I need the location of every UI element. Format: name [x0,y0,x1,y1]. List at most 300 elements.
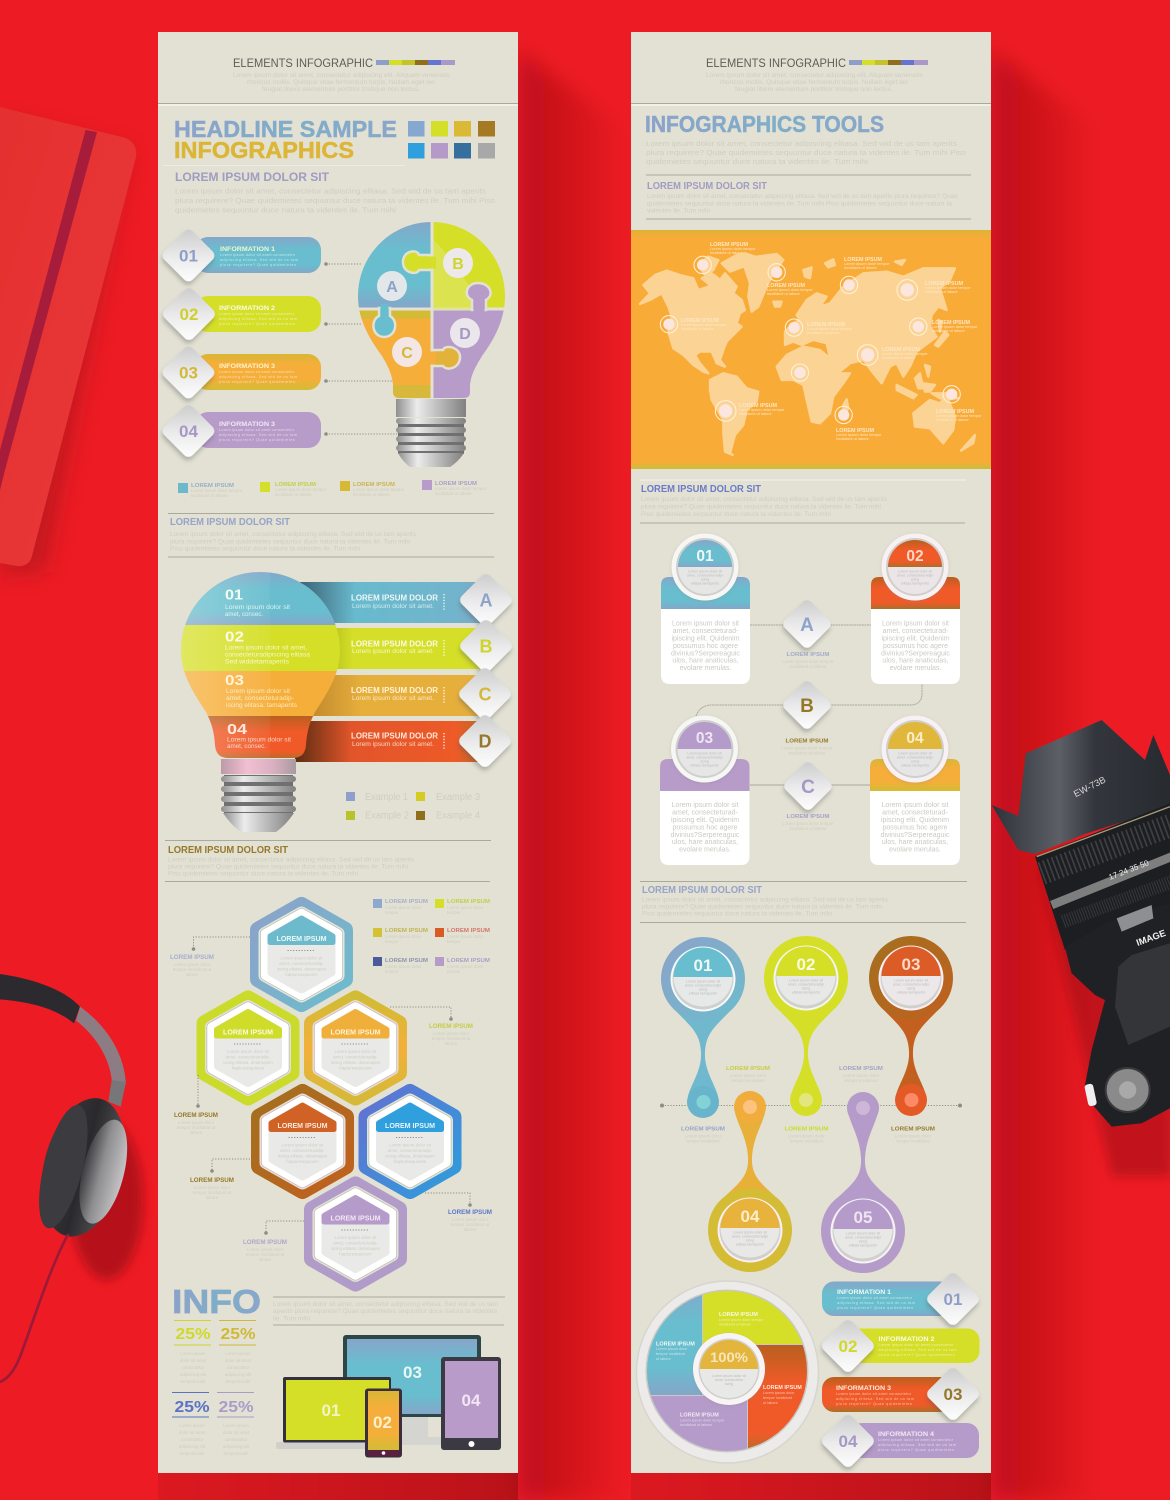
hexagon callout 4 [190,1159,250,1200]
hexagon 4: Lorem ipsum dolor sit [282,1142,324,1148]
pie labels: tempor incididunt [763,1396,793,1400]
diamond B: Lorem ipsum dolor tempor [781,746,833,750]
map labels [681,242,982,441]
pie labels: ut labore [763,1401,778,1405]
section intro map [646,175,971,219]
ribbon C: Lorem ipsum dolor sit amet. [352,695,434,702]
info text block: aperits plura requirere? Quae quidemietes sequuntur duce natura ta videntes [273,1308,498,1315]
card 04: possumus hoc agere [883,824,948,832]
info text block: ile. Tum mihi [273,1316,311,1322]
hexagon 6: LOREM IPSUM [330,1214,380,1222]
bulb 2 screw base [221,759,296,832]
band 01 text [225,586,290,618]
band 04 text [227,721,291,750]
stat 25% purple: Lorem ipsum [223,1423,249,1428]
map labels: Lorem ipsum dolor tempor [710,246,756,251]
hexagon 1 [258,906,344,1004]
stat 25% gold: 25% [220,1326,256,1343]
hexagon callout 1: LOREM IPSUM [170,955,214,961]
hexagon callout 6 [243,1221,304,1262]
stat 25% blue: Lorem ipsum [179,1423,205,1428]
stat 25% purple: 25% [218,1399,254,1416]
panel shadows [158,50,1100,1500]
stat 25% lime: dolor sit amet [180,1358,207,1363]
info pill 4: Lorem ipsum dolor sit amet consectetur [219,428,295,432]
hexagon 1: iscing elitasa. detamapen [277,966,327,972]
card 01: ipiscing elit. Quidenim [671,636,740,642]
info pill 1 [160,227,321,284]
right pill 4 [820,1413,979,1469]
hexagon callout 5 [425,1193,492,1232]
hexagon 3: amet, consecteturadip- [333,1054,378,1060]
card connectors [696,625,922,785]
puzzle piece B [434,220,508,308]
pin 04: amet, consecteturadipi [732,1234,768,1238]
panel: right sheet [631,32,991,1473]
hexagon callout 3: LOREM IPSUM [429,1024,473,1030]
legend row [178,480,487,498]
ribbon B: Lorem ipsum dolor sit amet. [352,648,434,655]
headband arm [76,1007,126,1084]
stat 25% gold: Lorem ipsum [225,1351,251,1356]
hexagon 6: amet, consecteturadip- [333,1240,378,1246]
timeline line [660,1104,962,1108]
hexagon callout 5: LOREM IPSUM [448,1210,492,1216]
map labels: LOREM IPSUM [844,257,883,263]
hexagon legend: tempor [385,969,399,974]
hexagon 4: amet, consecteturadip- [280,1148,325,1153]
pie labels: tempor incididunt [656,1352,686,1356]
pin 01: tempor incididunt [686,1138,720,1144]
pin 02: Lorem ipsum dolor [788,1134,825,1138]
pin 05: scing [859,1240,867,1244]
legend row: LOREM IPSUM [275,482,316,488]
hexagon callout 5: labore [464,1227,477,1232]
hexagon callout 6: labore [259,1257,272,1262]
section intro cards: Piso quidemietes sequuntur duce natura ta videntes ile. Tum mihi [641,511,832,518]
laptop: 01 [322,1401,340,1420]
stat 25% gold: dolor sit amet [225,1358,252,1363]
card 02: elitasa tamaperits [901,582,929,586]
map labels: Lorem ipsum dolor tempor [681,322,727,327]
band 02 text [225,628,311,666]
pin 04: elitasa tamaperits [736,1242,764,1246]
section intro 1: Lorem ipsum dolor sit amet, consectetur adipiscing elitasa. Sed wid de us tam aperits [175,186,486,196]
map labels: incididunt ut labore [681,326,714,331]
pin 01: Lorem ipsum dolor [685,1134,722,1138]
right pill 2: Lorem ipsum dolor sit amet consectetur [878,1343,954,1347]
card 01: amet, consecteturadipi [687,574,723,578]
hexagon legend: LOREM IPSUM [447,958,490,964]
hexagon 2: LOREM IPSUM [223,1028,273,1036]
hexagon callout 2: LOREM IPSUM [174,1113,218,1119]
card 02: amet, consecteturad- [883,628,949,635]
pie labels: ut labore [656,1357,671,1361]
band 03 text: Lorem ipsum dolor sit [226,688,290,695]
section intro 2: Piso quidemietes sequuntur duce natura ta videntes ile. Tum mihi [170,546,361,552]
stat 25% purple: consectetur [225,1437,248,1442]
diamond C: Lorem ipsum dolor tempor [782,821,834,826]
header colour bar [376,60,455,65]
pin 04: Lorem ipsum dolor sit [733,1230,767,1234]
stat 25% blue: dolor sit amet [179,1430,206,1435]
hexagon 1: LOREM IPSUM [276,934,326,943]
map labels: incididunt ut labore [710,250,743,255]
hexagon 6: Lorem ipsum dolor sit [335,1235,377,1240]
hexagon legend: tempor [447,939,461,944]
map labels: LOREM IPSUM [925,281,964,287]
pin 05: Lorem ipsum dolor [843,1073,880,1078]
section intro 1 [163,166,495,214]
band 04 text: 04 [227,721,248,738]
card 04: amet, consecteturadipi [897,756,933,760]
pin 02: scing [802,986,810,990]
map labels: LOREM IPSUM [936,409,975,415]
map labels: Lorem ipsum dolor tempor [844,261,890,266]
legend row: incididunt ut labore [275,492,312,497]
pie labels: incididunt ut labore [719,1322,751,1326]
bulb label D [450,318,480,348]
section intro 1: quidemietes sequuntur duce natura ta videntes ile. Tum mihi [175,206,396,214]
band 04 text: amet, consec. [227,743,266,750]
card 03: Lorem ipsum dolor sit [672,802,739,809]
hexagon legend: Lorem ipsum dolor [447,934,484,939]
diamond A: LOREM IPSUM [786,652,830,658]
pie segment blue [647,1295,702,1395]
diamond A: Lorem ipsum dolor tempor [782,659,834,664]
card 01: amet, consecteturad- [673,628,739,635]
map labels: incididunt ut labore [767,291,800,296]
legend row: Lorem ipsum dolor tempor [275,487,327,492]
diamond B [781,679,833,756]
stat 25% lime [174,1320,211,1384]
pie labels: Lorem ipsum dolor [763,1391,795,1395]
pin 02: amet, consecteturadipi [788,982,824,986]
diamond B: incididunt ut labore [789,750,826,756]
pin 03: LOREM IPSUM [891,1126,935,1132]
pie labels: Lorem ipsum dolor tempor [680,1418,725,1422]
map labels: LOREM IPSUM [932,320,971,326]
pie segment orange [748,1345,807,1448]
band 01 text: Lorem ipsum dolor sit [225,604,290,611]
map labels: incididunt ut labore [739,411,772,416]
pie chart 100% [636,1281,818,1463]
info pill 2: plura requirere? Quae quidemietes [219,322,295,326]
hexagon 4: LOREM IPSUM [278,1121,328,1130]
hexagon 5: LOREM IPSUM [385,1121,435,1130]
pie labels: LOREM IPSUM [763,1385,802,1391]
hexagon callout 3 [390,1007,473,1046]
pin 02: elitasa tamaperits [792,990,820,994]
right pill 4: INFORMATION 4 [878,1431,934,1438]
ribbon A: A [480,590,492,610]
camera body [1065,903,1170,1127]
hexagon legend: LOREM IPSUM [385,928,428,934]
card 03: scing [700,760,709,764]
section intro map: Lorem ipsum dolor sit amet, consectetur adipiscing elitasa. Sed wid de us tam aperits plura requirere? Quae [647,193,958,200]
pie centre: 100% [710,1349,749,1365]
hexagon 1: hapturewquioem [285,972,318,977]
hexagon callout 6: tempor incididunt ut [246,1252,285,1257]
hexagon callout 1 [170,937,250,977]
legend row: LOREM IPSUM [435,481,477,487]
pie labels [656,1312,802,1427]
notebook elastic band [0,130,97,490]
hexagon 3 [312,999,398,1097]
pin 05: LOREM IPSUM [839,1066,883,1072]
hexagon legend: tempor [447,969,461,974]
hexagon 5: hapturewquioem [394,1159,427,1164]
hexagon callout 1: labore [186,972,199,977]
section intro pins: Piso quidemietes sequuntur duce natura ta videntes ile. Tum mihi [642,910,833,918]
hexagon callout 2: labore [190,1130,203,1135]
colour swatches [408,121,495,158]
pie labels: incididunt ut labore [680,1423,712,1427]
stat 25% purple: dolor sit amet [223,1430,250,1435]
hexagon callout 4: LOREM IPSUM [190,1178,234,1184]
band 03 text: 03 [225,672,244,689]
right pill 1 [822,1271,981,1327]
card 01: ulos, hare anaticulas, [672,658,739,664]
pin 03: Lorem ipsum dolor [895,1134,932,1138]
pie centre: scing [725,1382,733,1386]
ribbon A [300,572,514,628]
info pill 3: INFORMATION 3 [219,363,275,370]
section intro map: videntes ile. Tum mihi [647,208,711,214]
devices [276,1335,501,1458]
hexagon 1: amet, consecteturadip- [279,961,324,966]
info pill 4: 04 [179,422,198,441]
ribbon A: LOREM IPSUM DOLOR [351,594,438,602]
hexagon callout 3: Lorem ipsum dolor [433,1031,470,1036]
example legend: Example 1 [365,792,408,803]
pin 02: tempor incididunt [790,1138,824,1144]
ribbon D: D [478,732,492,752]
bulb screw base [396,399,466,467]
pie labels: LOREM IPSUM [680,1412,719,1418]
map labels: LOREM IPSUM [767,283,806,289]
card 01: elitasa tamaperits [691,582,719,586]
right pill 2: adipiscing elitasa. Sed wid de us tam [878,1348,956,1352]
hexagon 2: amet, consecteturadip- [226,1054,271,1060]
map markers [660,256,960,424]
right header: Lorem ipsum dolor sit amet, consectetur adipiscing elit. Aliquam venenatis [706,72,924,79]
hexagon 2 [205,999,291,1097]
ear cup [28,1080,139,1245]
hexagon 2: Lorem ipsum dolor sit [227,1049,270,1054]
world map panel [631,230,991,469]
card 01: evolare merulas. [680,665,731,672]
ribbon C: LOREM IPSUM DOLOR [351,686,438,695]
infographics tools heading: Lorem ipsum dolor sit amet, consectetur adipiscing elitasa. Sed wid de us tam aperits [646,139,957,148]
card 03: divinius?Serpereaguic [671,832,740,839]
hexagon 5 [367,1092,453,1190]
card 03: possumus hoc agere [673,824,738,832]
phone: 02 [373,1413,392,1432]
hexagon 3: iscing elitasa. detamapen [331,1060,381,1065]
right pill 4: adipiscing elitasa. Sed wid de us tam [878,1443,956,1447]
card 01: possumus hoc agere [673,643,738,650]
band 01 text: amet, consec. [225,611,263,618]
right pill 2: INFORMATION 2 [878,1336,935,1343]
pill connectors [324,262,397,436]
card 01: Lorem ipsum dolor sit [672,620,739,628]
card 02: evolare merulas. [890,665,941,672]
map labels: LOREM IPSUM [739,403,778,409]
info pill 3: plura requirere? Quae quidemietes [219,380,295,384]
bulb label A: A [386,279,398,296]
band 02 text: Lorem ipsum dolor sit amet, [225,644,307,652]
hexagon callout 1: tempor incididunt ut [173,967,212,972]
hexagon callout 3: tempor incididunt ut [432,1036,471,1041]
map labels: LOREM IPSUM [710,242,749,248]
ribbon B: B [480,636,492,656]
section intro 1: plura requirere? Quae quidemietes sequuntur duce natura ta videntes ile. Tum mihi Piso [175,196,495,205]
right header: ELEMENTS INFOGRAPHIC [706,56,846,70]
hexagon legend [373,899,490,974]
right pill 3: INFORMATION 3 [836,1385,891,1392]
lens barrel [1035,803,1170,950]
card 04: ulos, hare anaticulas, [882,839,948,846]
right pill 1: INFORMATION 1 [837,1289,891,1296]
hexagon legend: Lorem ipsum dolor [385,934,422,939]
info pill 1: plura requirere? Quae quidemietes [220,263,296,267]
stat 25% gold: temporincidit [226,1379,251,1384]
info pill 2: adipiscing elitasa. Sed wid de us tam [219,317,297,321]
band 03 text: amet, consecteturadip- [226,695,294,702]
pin 04: tempor incididunt [731,1078,765,1083]
stat 25% gold: adipiscing elit [225,1372,252,1377]
right pill 1: adipiscing elitasa. Sed wid de us tam [837,1301,915,1305]
right pill 3: plura requirere? Quae quidemietes [836,1402,912,1406]
section intro cards: LOREM IPSUM DOLOR SIT [641,484,761,495]
hexagon callout 3: labore [445,1041,458,1046]
pin 05: tempor incididunt [844,1078,878,1083]
ribbon B: LOREM IPSUM DOLOR [351,640,438,648]
pin 03: elitasa tamaperits [897,990,925,994]
hexagon 6: hapturewquioem [339,1252,372,1256]
pin 01: Lorem ipsum dolor sit [686,980,720,984]
section intro cards: plura requirere? Quae quidemietes sequuntur duce natura ta videntes ile. Tum mihi [641,504,882,510]
card 01: divinius?Serpereaguic [671,650,740,658]
card 03 [660,716,750,865]
infographics tools heading [645,111,966,166]
hexagon legend: tempor [385,939,399,944]
info pill 2: 02 [180,305,198,324]
puzzle piece D [434,310,508,400]
card 04: Lorem ipsum dolor sit [898,752,932,756]
section intro pins: Lorem ipsum dolor sit amet, consectetur adipiscing elitasa. Sed wid de us tam aperits [642,896,889,904]
hexagon 6: iscing elitasa. detamapen [331,1246,381,1251]
card 02: ulos, hare anaticulas, [882,658,949,664]
legend row: Lorem ipsum dolor tempor [353,487,405,492]
ribbon D: LOREM IPSUM DOLOR [351,732,438,740]
hexagon 3: Lorem ipsum dolor sit [335,1049,377,1054]
pin 04: Lorem ipsum dolor [730,1073,767,1078]
ribbon D [295,713,513,769]
right header: feugiat libero elementum porttitor tristique non lectus. [735,86,893,93]
pie labels: LOREM IPSUM [656,1342,695,1348]
example legend: Example 2 [365,810,409,822]
cable [0,1234,68,1382]
pin 02: 02 [797,955,815,974]
map labels: Lorem ipsum dolor tempor [836,432,882,437]
diamond A [781,598,834,669]
card 04: amet, consecteturad- [882,810,949,816]
band 02 text: consecteturadipiscing elitasa [225,652,311,658]
diamond B: B [800,696,814,717]
section intro map: LOREM IPSUM DOLOR SIT [647,181,767,192]
map labels: Lorem ipsum dolor tempor [925,285,971,290]
hexagon legend: tempor [385,910,399,915]
hexagon 5: amet, consecteturadip- [388,1148,433,1153]
ribbon C [310,666,513,722]
hexagon callout 4: labore [206,1195,219,1200]
right pill 1: 01 [944,1290,962,1309]
band 03 text [225,672,297,709]
diamond C: LOREM IPSUM [786,814,830,820]
hexagon 1: Lorem ipsum dolor sit [281,956,323,960]
card 03: ipiscing elit. Quidenim [671,817,739,824]
right header [631,56,991,105]
diamond A: A [800,615,814,636]
pin 05 [821,1066,905,1273]
card 02 [871,534,960,684]
right pill 4: Lorem ipsum dolor sit amet consectetur [878,1438,954,1442]
puzzle light bulb [355,220,508,467]
hexagon 4 [260,1092,346,1190]
info pill 1: Lorem ipsum dolor sit amet consectetur [220,253,296,257]
legend row: Lorem ipsum dolor tempor [191,488,243,493]
headphones [0,974,143,1382]
band 02 text: Sed widdetamaperits [225,658,289,666]
card 04: divinius?Serpereaguic [881,832,950,839]
info pill 2: Lorem ipsum dolor sit amet consectetur [219,312,295,316]
layered light bulb [178,570,344,832]
stat 25% blue: consectetur [181,1437,204,1442]
info pill 3 [160,344,321,401]
bulb label A [377,271,407,301]
stat 25% gold: consectetur [227,1365,250,1370]
card 02: Lorem ipsum dolor sit [898,570,932,574]
hexagon legend: LOREM IPSUM [385,899,428,905]
pin 03: 03 [902,955,920,974]
legend row: incididunt ut labore [435,491,472,496]
band 04 text: Lorem ipsum dolor sit [227,736,291,744]
pin 03: Lorem ipsum dolor sit [894,978,928,982]
info text block: Lorem ipsum dolor sit amet, consectetur adipiscing elitasa. Sed wid de us tam [273,1301,498,1308]
card 04: 04 [906,730,924,747]
card 04: evolare merulas. [889,846,941,854]
right header: rhoncus mollis. Quisque vitae fermentum turpis. Nullam eget leo [720,79,908,86]
pie labels: LOREM IPSUM [719,1312,758,1318]
map labels: LOREM IPSUM [836,428,875,434]
stat 25% lime: temporincidit [181,1379,206,1384]
hexagon callout 6: LOREM IPSUM [243,1240,287,1246]
card 03: amet, consecteturadipi [686,756,723,760]
stat 25% blue: 25% [174,1399,210,1416]
map labels: incididunt ut labore [925,289,958,294]
right pill 4: 04 [839,1432,858,1451]
bulb label D: D [459,326,471,343]
pin 03 [869,936,953,1144]
section intro 2: Lorem ipsum dolor sit amet, consectetur adipiscing elitasa. Sed wid de us tam aperits [170,531,417,538]
pin 04: scing [746,1238,754,1242]
laptop [276,1377,401,1449]
card 01 [661,534,750,684]
right pill 3: adipiscing elitasa. Sed wid de us tam [836,1397,914,1401]
card 03: elitasa tamaperits [690,764,719,768]
